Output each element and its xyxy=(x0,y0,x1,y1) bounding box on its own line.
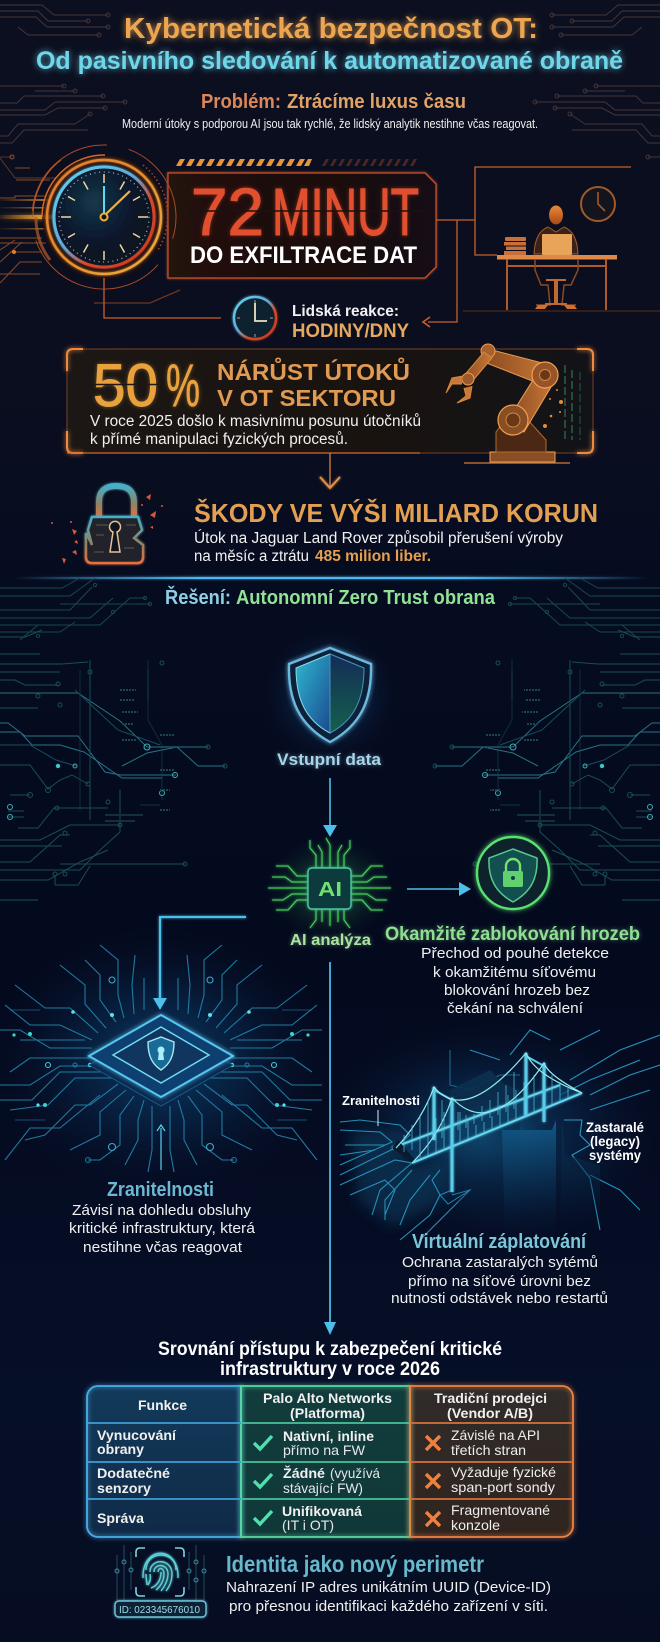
icon: fingerprint id xyxy=(115,1545,206,1617)
problem subtitle: Moderní útoky s podporou AI jsou tak rychlé, že lidský analytik nestihne včas reagovat. xyxy=(122,117,538,131)
row: enforcement: třetích stran xyxy=(451,1442,526,1458)
row: sensors: Žádné xyxy=(283,1464,325,1481)
label: AI analysis: AI analýza xyxy=(290,932,371,949)
body: V roce 2025 došlo k masivnímu posunu útočníků xyxy=(90,413,421,430)
deck xyxy=(392,1085,582,1163)
cables xyxy=(396,1053,582,1163)
heading: Zranitelnosti xyxy=(107,1179,214,1201)
row: sensors: senzory xyxy=(97,1480,151,1496)
title line 2: Od pasivního sledování k automatizované obraně xyxy=(36,47,623,75)
row: enforcement: přímo na FW xyxy=(283,1442,366,1458)
icon: analyst at desk xyxy=(463,187,660,311)
block threats text xyxy=(385,924,640,1017)
outer rings xyxy=(42,155,166,279)
row: management: konzole xyxy=(451,1517,500,1533)
chip board illustration xyxy=(0,925,336,1195)
icon: fingerprint id: ID: 023345676010 xyxy=(119,1604,200,1616)
row: sensors: (využívá xyxy=(330,1465,380,1481)
row: management: Správa xyxy=(97,1510,144,1526)
frame xyxy=(67,349,593,453)
table grid xyxy=(87,1386,573,1537)
body: Přechod od pouhé detekce xyxy=(421,945,609,962)
label: input data: Vstupní data xyxy=(277,750,382,769)
block threats text: čekání na schválení xyxy=(447,1000,584,1017)
damages block: na měsíc a ztrátu xyxy=(194,548,309,565)
side circuits xyxy=(115,1545,206,1600)
clock face xyxy=(54,167,154,267)
row: sensors: Dodatečné xyxy=(97,1465,170,1481)
value: HODINY/DNY xyxy=(292,321,409,342)
block threats text: k okamžitému síťovému xyxy=(433,964,596,981)
vulnerabilities text: kritické infrastruktury, která xyxy=(69,1220,256,1237)
shield with keyhole xyxy=(148,1037,174,1070)
bridge illustration xyxy=(315,1015,660,1245)
desk xyxy=(497,255,617,260)
heading: Okamžité zablokování hrozeb xyxy=(385,924,640,945)
panel: 72 minut xyxy=(168,159,436,278)
row: enforcement: Vynucování xyxy=(97,1427,177,1443)
vulnerabilities text: nestihne včas reagovat xyxy=(83,1239,243,1256)
problem heading: Problém: xyxy=(201,91,281,113)
comparison heading: Srovnání přístupu k zabezpečení kritické xyxy=(158,1339,502,1360)
problem heading: Ztrácíme luxus času xyxy=(287,91,466,113)
table header xyxy=(138,1390,547,1421)
damages block: 485 milion liber. xyxy=(315,548,431,565)
laptop xyxy=(542,234,572,255)
percent value: % xyxy=(166,352,200,419)
books xyxy=(504,237,526,255)
row: enforcement xyxy=(97,1427,540,1458)
label: legacy systems xyxy=(586,1120,644,1163)
decorative data xyxy=(565,365,580,440)
title xyxy=(36,13,623,75)
row: management: Unifikovaná xyxy=(282,1503,362,1519)
row: sensors: stávající FW) xyxy=(283,1480,363,1496)
big number: 72 xyxy=(191,175,264,250)
damages block xyxy=(194,498,598,565)
label: vulnerabilities: Zranitelnosti xyxy=(342,1094,420,1108)
diamond chip xyxy=(89,1024,233,1106)
percent value xyxy=(90,352,200,419)
row: sensors: Vyžaduje fyzické xyxy=(451,1464,556,1480)
identity text xyxy=(226,1551,551,1615)
label: Lidská reakce: xyxy=(292,303,399,320)
label: legacy systems: (legacy) xyxy=(590,1134,640,1149)
human reaction block xyxy=(234,297,409,342)
block threats text: blokování hrozeb bez xyxy=(444,982,590,999)
hands xyxy=(103,186,105,213)
speed lines xyxy=(0,155,58,283)
towers xyxy=(434,1053,544,1192)
stripes xyxy=(176,159,417,166)
virtual patching text: nutnosti odstávek nebo restartů xyxy=(391,1290,608,1307)
buildings xyxy=(450,1070,520,1230)
icon: broken padlock xyxy=(51,486,163,564)
row: management xyxy=(97,1502,550,1533)
body: Ochrana zastaralých sytémů xyxy=(402,1254,598,1271)
heading: NÁRŮST ÚTOKŮ xyxy=(217,356,410,385)
icon: green shield lock xyxy=(477,837,549,909)
panel frame xyxy=(168,173,436,278)
icon: AI chip: AI xyxy=(318,879,342,901)
legs and stool xyxy=(535,259,578,305)
ground plates xyxy=(352,1130,450,1226)
solution heading: Autonomní Zero Trust obrana xyxy=(236,587,496,609)
icon: small clock xyxy=(234,297,276,339)
big number: MINUT xyxy=(272,175,419,250)
comparison heading: infrastruktury v roce 2026 xyxy=(220,1359,440,1380)
wall clock xyxy=(581,187,615,221)
label: legacy systems: systémy xyxy=(589,1148,641,1163)
table header: (Vendor A/B) xyxy=(447,1405,533,1421)
arrow: AI to vulnerabilities xyxy=(153,917,246,1010)
body: Závisí na dohledu obsluhy xyxy=(72,1202,252,1219)
icon: shield xyxy=(260,625,400,765)
row: sensors: span-port sondy xyxy=(451,1479,555,1495)
heading: ŠKODY VE VÝŠI MILIARD KORUN xyxy=(194,498,598,528)
icon: AI chip xyxy=(268,836,392,940)
table header: (Platforma) xyxy=(290,1405,365,1421)
identity text: pro přesnou identifikaci každého zařízení v síti. xyxy=(229,1598,548,1615)
percent value: 50 xyxy=(93,352,158,419)
traces xyxy=(340,1030,660,1240)
arrow: input to AI xyxy=(323,778,337,837)
body: Nahrazení IP adres unikátním UUID (Device-ID) xyxy=(226,1579,551,1596)
circuit background: solution and middle xyxy=(0,578,660,900)
table fills xyxy=(87,1386,573,1537)
divider xyxy=(13,577,648,579)
panel: 50 percent: V OT SEKTORU xyxy=(217,385,396,411)
fingerprint xyxy=(143,1553,178,1591)
problem heading xyxy=(201,91,466,113)
comparison table xyxy=(87,1386,573,1537)
scan brackets xyxy=(136,1548,184,1596)
row: management: Fragmentované xyxy=(451,1502,550,1518)
vertical arrow xyxy=(157,1125,165,1170)
panel: 50 percent xyxy=(67,344,593,463)
connector: panel to analyst bracket xyxy=(94,167,631,327)
comparison heading xyxy=(158,1339,502,1380)
icon: robot arm xyxy=(446,344,570,463)
vulnerabilities text xyxy=(69,1179,256,1256)
virtual patching text xyxy=(391,1231,608,1307)
heading: Identita jako nový perimetr xyxy=(226,1551,484,1577)
panel: 50 percent: k přímé manipulaci fyzických procesů. xyxy=(90,431,348,448)
row: enforcement: Závislé na API xyxy=(451,1427,540,1443)
virtual patching text: přímo na síťové úrovni bez xyxy=(408,1273,591,1290)
ticks xyxy=(61,174,148,260)
arrow: AI to block xyxy=(407,882,471,896)
row: enforcement: obrany xyxy=(97,1441,144,1457)
ID tag xyxy=(115,1601,206,1617)
arrow: attacks to damages xyxy=(257,453,404,488)
table header: Tradiční prodejci xyxy=(434,1390,547,1406)
heading: Virtuální záplatování xyxy=(412,1231,587,1253)
table header: Funkce xyxy=(138,1397,187,1413)
row: management: (IT i OT) xyxy=(282,1517,334,1533)
body: Útok na Jaguar Land Rover způsobil přerušení výroby xyxy=(194,530,563,547)
solution heading: Řešení: xyxy=(165,585,231,609)
table header: Palo Alto Networks xyxy=(263,1390,392,1406)
row: enforcement: Nativní, inline xyxy=(283,1428,374,1444)
label: legacy systems: Zastaralé xyxy=(586,1120,644,1135)
title line 1: Kybernetická bezpečnost OT: xyxy=(124,13,538,45)
person xyxy=(549,206,563,224)
big number xyxy=(188,175,422,250)
solution heading xyxy=(165,585,496,609)
caption: DO EXFILTRACE DAT xyxy=(190,242,417,269)
circuit background: top xyxy=(0,5,660,159)
row: sensors xyxy=(97,1464,556,1496)
label: vulnerabilities xyxy=(342,1094,420,1126)
arrow: main vertical xyxy=(324,962,336,1335)
icon: big clock xyxy=(0,125,196,309)
